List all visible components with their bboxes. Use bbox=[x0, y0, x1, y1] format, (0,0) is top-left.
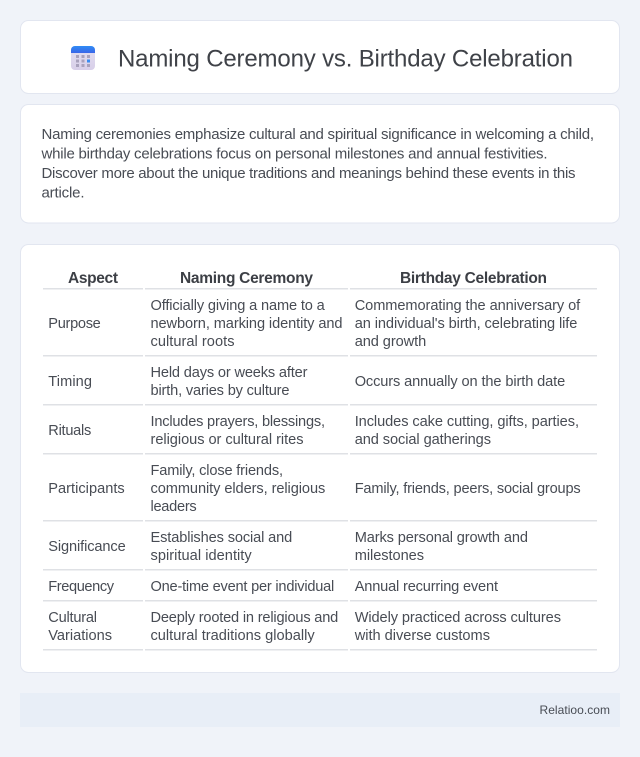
row: Significance: Establishes social and bbox=[150, 530, 292, 546]
table header row bbox=[43, 270, 597, 290]
row: Cultural Variations: cultural traditions globally bbox=[150, 628, 315, 644]
footer brand: Relatioo.com bbox=[540, 703, 610, 717]
intro text: Naming ceremonies emphasize cultural and spiritual significance in welcoming a child, bbox=[42, 126, 594, 143]
panel: title header bbox=[20, 20, 620, 94]
row: Cultural Variations bbox=[43, 610, 597, 650]
intro text: Discover more about the unique traditions and meanings behind these events in this bbox=[42, 165, 576, 182]
row: Participants: community elders, religious bbox=[150, 481, 325, 497]
row: Purpose: Commemorating the anniversary of bbox=[355, 298, 581, 314]
row: Timing: Timing bbox=[48, 374, 92, 390]
row: Frequency bbox=[43, 579, 597, 602]
row: Significance: milestones bbox=[355, 548, 424, 564]
panel: introduction bbox=[20, 104, 620, 223]
row: Rituals bbox=[43, 414, 597, 454]
row: Participants: Participants bbox=[48, 481, 125, 497]
row: Rituals: and social gatherings bbox=[355, 432, 491, 448]
icon: calendar bbox=[71, 46, 95, 70]
row: Significance bbox=[43, 530, 597, 570]
row: Rituals: Includes cake cutting, gifts, parties, bbox=[355, 414, 579, 430]
table header row: Naming Ceremony bbox=[180, 270, 313, 287]
row: Cultural Variations: Deeply rooted in religious and bbox=[150, 610, 338, 626]
row: Timing: birth, varies by culture bbox=[150, 383, 290, 399]
row: Significance: Marks personal growth and bbox=[355, 530, 528, 546]
intro text bbox=[40, 126, 594, 202]
intro text: while birthday celebrations focus on personal milestones and annual festivities. bbox=[40, 146, 548, 162]
row: Cultural Variations: Widely practiced across cultures bbox=[355, 610, 561, 626]
row: Frequency: One-time event per individual bbox=[150, 579, 334, 595]
row: Frequency: Annual recurring event bbox=[355, 579, 498, 595]
row: Cultural Variations: Cultural bbox=[48, 610, 97, 626]
row: Purpose: Officially giving a name to a bbox=[150, 298, 326, 314]
row: Timing: Held days or weeks after bbox=[150, 365, 308, 381]
row: Rituals: Includes prayers, blessings, bbox=[150, 414, 325, 430]
row: Cultural Variations: with diverse customs bbox=[354, 628, 490, 644]
row: Participants: Family, friends, peers, social groups bbox=[355, 481, 581, 497]
row: Purpose: an individual's birth, celebrating life bbox=[355, 316, 577, 332]
row: Significance: spiritual identity bbox=[150, 548, 252, 564]
row: Significance: Significance bbox=[48, 539, 126, 555]
footer bbox=[20, 693, 620, 727]
row: Cultural Variations: Variations bbox=[48, 628, 112, 644]
row: Purpose: and growth bbox=[355, 334, 426, 350]
row: Purpose: newborn, marking identity and bbox=[150, 316, 342, 332]
row: Participants: Family, close friends, bbox=[150, 463, 283, 479]
row: Purpose: Purpose bbox=[48, 316, 101, 332]
panel: comparison table bbox=[20, 244, 620, 672]
table header row: Birthday Celebration bbox=[400, 270, 547, 287]
row: Participants: leaders bbox=[150, 499, 197, 515]
row: Purpose bbox=[43, 298, 597, 356]
intro text: article. bbox=[42, 184, 84, 202]
row: Rituals: Rituals bbox=[48, 423, 91, 439]
row: Participants bbox=[43, 463, 597, 522]
row: Purpose: cultural roots bbox=[150, 334, 234, 350]
row: Frequency: Frequency bbox=[48, 579, 115, 595]
title: Naming Ceremony vs. Birthday Celebration bbox=[118, 46, 573, 72]
row: Timing: Occurs annually on the birth date bbox=[355, 374, 565, 390]
row: Rituals: religious or cultural rites bbox=[150, 432, 304, 448]
table header row: Aspect bbox=[68, 270, 118, 287]
row: Timing bbox=[43, 365, 597, 406]
